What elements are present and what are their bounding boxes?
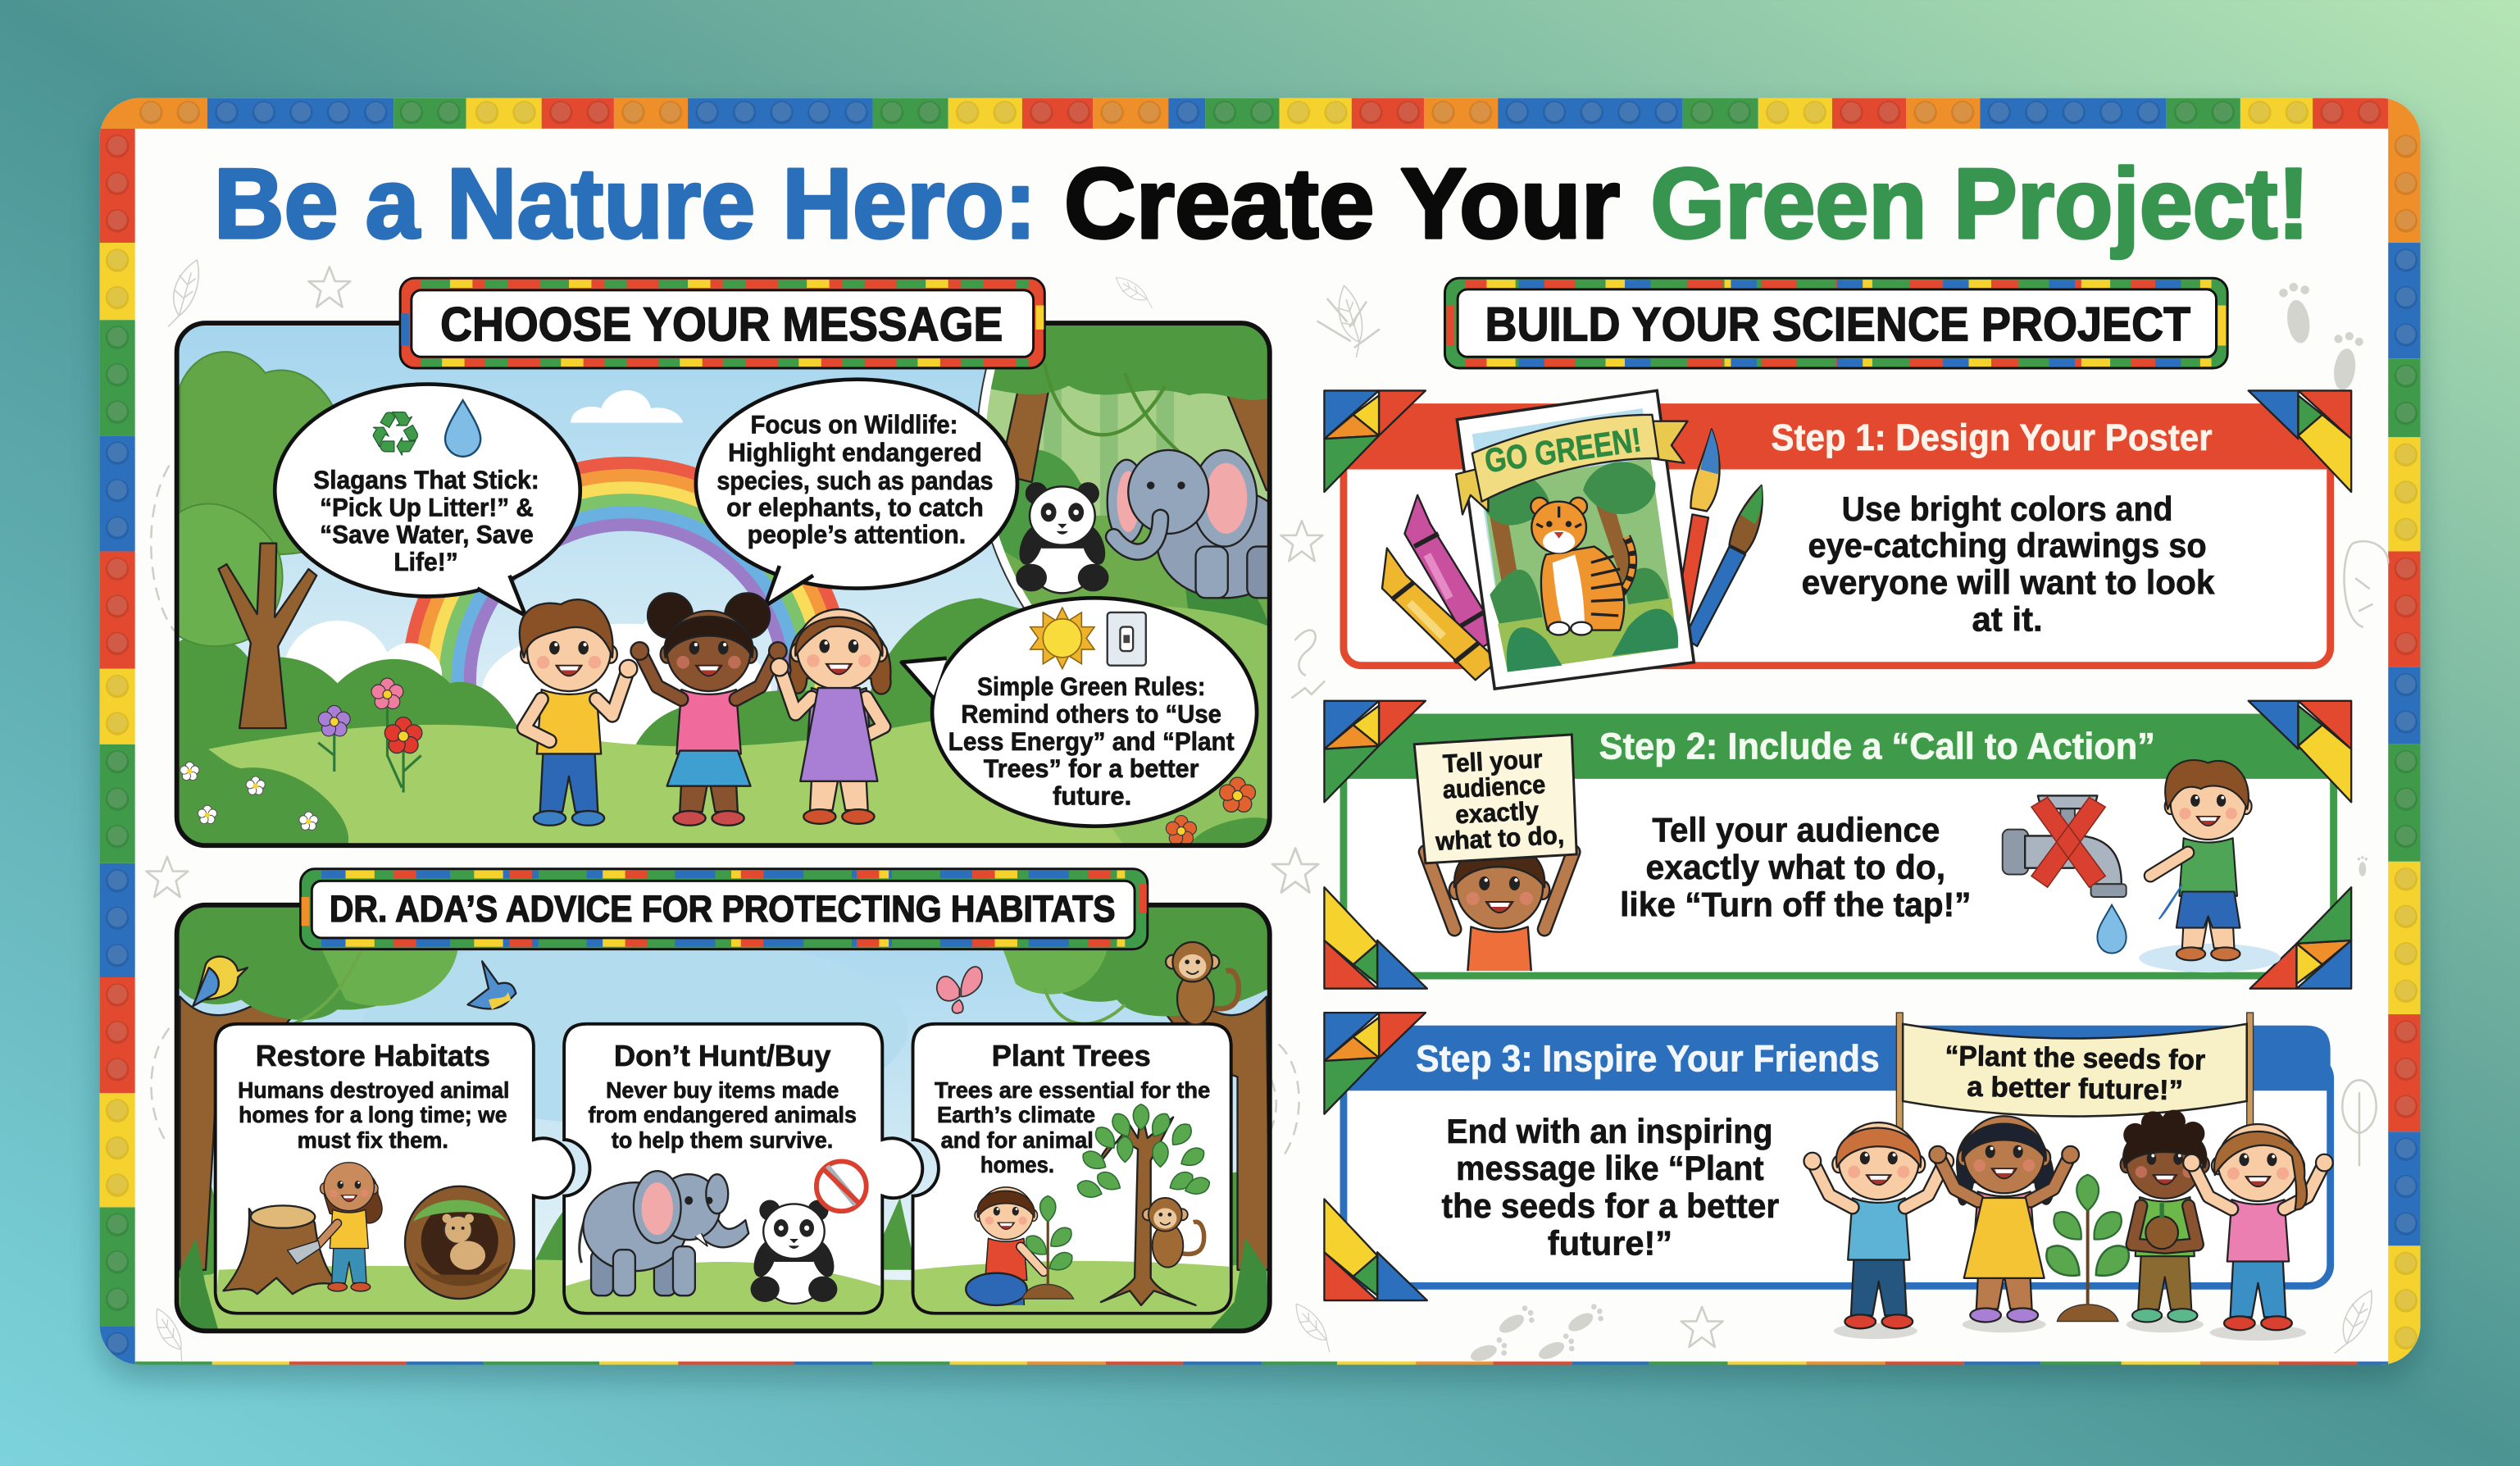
speech bubble: green rules: Simple Green Rules:	[977, 672, 1205, 701]
step 1 body text: at it.	[1972, 599, 2043, 638]
icon: butterfly	[937, 967, 982, 1013]
card: don't hunt or buy: from endangered animals	[589, 1102, 857, 1127]
card: restore habitats: homes for a long time; we	[239, 1102, 507, 1127]
tangram corner top-left	[1324, 701, 1426, 802]
icon: flying blue bird	[467, 961, 516, 1009]
title: Be a Nature Hero:	[214, 148, 1036, 259]
speech bubble: wildlife: Highlight endangered	[728, 439, 982, 467]
banner: plant the seeds	[1896, 1013, 2254, 1141]
tangram corner bottom-left	[1324, 887, 1427, 989]
icon: recycle: ♻	[368, 398, 423, 470]
icon: monkey on tree	[1143, 1198, 1204, 1268]
step 1 body text	[1802, 489, 2215, 638]
speech bubble: wildlife: people’s attention.	[748, 521, 966, 549]
step 2 body text: exactly what to do,	[1646, 848, 1945, 886]
icon: panda	[1015, 482, 1110, 593]
hills and bushes	[177, 598, 1029, 772]
step 3 body text	[1442, 1112, 1779, 1263]
bubble text: “Pick Up Litter!” &	[320, 493, 534, 521]
child with trowel	[288, 1163, 382, 1291]
heading: choose your message	[400, 278, 1044, 368]
step 3 body text: future!”	[1548, 1224, 1672, 1263]
flowers	[318, 678, 422, 793]
child: boy holding plant pot	[2121, 1110, 2209, 1322]
clouds behind children	[285, 620, 771, 744]
step 2 band	[1340, 713, 2334, 779]
step 3 body text: End with an inspiring	[1446, 1112, 1772, 1150]
banner: plant the seeds: a better future!”	[1967, 1072, 2183, 1106]
icon: sun	[1030, 608, 1094, 669]
card: plant trees	[913, 1024, 1231, 1327]
speech bubble: green rules: Trees” for a better	[984, 754, 1199, 783]
step 1 body text: everyone will want to look	[1802, 563, 2215, 602]
puddle	[2139, 944, 2281, 972]
step 1 band	[1340, 403, 2334, 469]
bottom-left bush with white flowers	[177, 740, 348, 845]
step 1 body text: Use bright colors and	[1842, 489, 2173, 528]
child: boy in blue shirt	[1804, 1122, 1954, 1328]
card drop shadow	[100, 112, 2420, 1379]
child: girl in yellow dress	[1929, 1116, 2079, 1322]
icon: monkey on branch	[1166, 942, 1239, 1025]
rainbow	[405, 457, 839, 690]
sign: tell your audience: what to do,	[1434, 821, 1565, 856]
speech bubble: wildlife	[696, 380, 1017, 606]
doodles: faint background leaves, stars and footprints	[146, 257, 2388, 1361]
bubble text: Slagans That Stick:	[313, 466, 539, 494]
step 1 band title: Step 1: Design Your Poster	[1771, 417, 2213, 458]
card: don't hunt or buy: to help them survive.	[612, 1127, 833, 1153]
title: Create Your	[1064, 148, 1620, 259]
icon: elephant	[1108, 450, 1292, 598]
trees and foliage	[177, 905, 1270, 1331]
icon: animal burrow	[405, 1186, 514, 1299]
tangram corner bottom-left	[1324, 1200, 1427, 1300]
step 2 body text: like “Turn off the tap!”	[1620, 885, 1972, 923]
icon: panda	[749, 1200, 839, 1304]
background hills	[177, 1161, 1270, 1286]
child holding sign	[1426, 843, 1573, 1068]
card: plant trees: Trees are essential for the	[935, 1077, 1210, 1103]
child: girl in purple dress	[771, 609, 890, 824]
child: girl in pink shirt	[2183, 1124, 2333, 1330]
step 2 body text	[1620, 811, 1972, 923]
heading: Dr. Ada's advice: DR. ADA’S ADVICE FOR PROTECTING HABITATS	[330, 888, 1116, 930]
panel: choose your message	[177, 278, 1292, 900]
card: don't hunt or buy: Never buy items made	[606, 1077, 839, 1103]
jungle scene	[964, 321, 1292, 845]
step 3 band	[1340, 1026, 2331, 1090]
card: plant trees: Earth’s climate	[937, 1102, 1095, 1127]
speech bubble: green rules: future.	[1053, 781, 1131, 810]
lego brick border	[100, 98, 2422, 1366]
speech bubble: wildlife: Focus on Wildlife:	[751, 410, 958, 439]
tangram corner top-right	[2249, 390, 2351, 492]
tangram corner bottom-right	[2250, 887, 2351, 989]
step 1 panel	[1324, 390, 2351, 689]
footprints bottom	[1471, 1304, 1603, 1361]
icon: sapling and mound	[1021, 1196, 1076, 1299]
card: don't hunt or buy: Don’t Hunt/Buy	[614, 1039, 831, 1072]
big tree	[177, 352, 341, 728]
step 2 panel	[1324, 701, 2351, 1068]
boy washing hands	[2150, 760, 2252, 960]
grass	[177, 703, 1270, 845]
card: restore habitats	[216, 1024, 574, 1313]
icon: water tap with red cross	[2003, 795, 2127, 954]
tangram corner top-left	[1324, 1013, 1426, 1114]
sign: tell your audience: exactly	[1454, 796, 1540, 829]
icon: young plant	[2040, 1175, 2136, 1322]
icon: water drop	[2097, 905, 2127, 954]
card: plant trees: and for animal	[941, 1127, 1094, 1153]
footprints top right	[2278, 280, 2368, 876]
step 3 body text: the seeds for a better	[1442, 1186, 1779, 1225]
heading: build your science project: BUILD YOUR SCIENCE PROJECT	[1485, 298, 2190, 352]
speech bubble: wildlife: or elephants, to catch	[726, 493, 984, 521]
step 2 band title: Step 2: Include a “Call to Action”	[1599, 725, 2155, 767]
sign: tell your audience	[1414, 735, 1576, 863]
child: boy in yellow shirt	[520, 599, 637, 826]
card: restore habitats: Restore Habitats	[256, 1039, 490, 1072]
icon: water drop	[445, 400, 480, 457]
go green poster: GO GREEN!	[1482, 421, 1644, 480]
title	[218, 164, 2302, 261]
sign: tell your audience: Tell your	[1442, 744, 1543, 778]
bubble text	[313, 466, 539, 576]
step 1 body text: eye-catching drawings so	[1808, 526, 2207, 565]
poster ribbon	[1456, 421, 1687, 514]
speech bubble: green rules	[902, 598, 1257, 826]
icon: light switch	[1108, 612, 1146, 666]
tiger	[1531, 498, 1633, 635]
icon: perched bird	[193, 957, 248, 1006]
card: don't hunt or buy	[564, 1024, 922, 1313]
card: plant trees: homes.	[980, 1152, 1054, 1177]
banner: plant the seeds: “Plant the seeds for	[1945, 1040, 2205, 1077]
grass	[177, 1259, 1270, 1331]
heading: choose your message: CHOOSE YOUR MESSAGE	[440, 298, 1003, 352]
sign: tell your audience: audience	[1442, 770, 1546, 804]
speech bubble: green rules: Remind others to “Use	[961, 699, 1221, 728]
icon: tree with roots	[1075, 1104, 1212, 1305]
icon: no-buying sign	[816, 1161, 867, 1211]
ground foliage lower right	[1029, 604, 1270, 845]
step 3 body text: message like “Plant	[1456, 1149, 1764, 1187]
ground shadows	[1834, 1317, 2306, 1341]
step 3 panel	[1324, 1013, 2333, 1341]
heading: Dr. Ada's advice	[301, 869, 1148, 949]
tangram corner top-right	[2249, 701, 2351, 802]
icon: tree stump	[224, 1205, 341, 1294]
icon: paintbrushes	[1675, 429, 1763, 646]
card: restore habitats: must fix them.	[298, 1127, 448, 1153]
bubble text: Life!”	[393, 548, 458, 576]
icon: crayons	[1382, 495, 1499, 680]
child planting sapling	[966, 1187, 1044, 1327]
bubble text: “Save Water, Save	[320, 521, 534, 549]
tangram corner top-left	[1324, 390, 1426, 492]
panel: Dr. Ada's advice	[177, 869, 1270, 1331]
icon: elephant	[580, 1171, 748, 1295]
heading: build your science project	[1444, 278, 2227, 368]
speech bubble: green rules: Less Energy” and “Plant	[948, 727, 1235, 756]
title: Green Project!	[1650, 148, 2309, 259]
speech bubble: wildlife: species, such as pandas	[716, 467, 994, 495]
child: girl in pink shirt	[630, 593, 787, 826]
small cloud	[571, 390, 683, 423]
speech bubble: slogans	[275, 385, 580, 616]
step 3 band title: Step 3: Inspire Your Friends	[1416, 1038, 1880, 1080]
card: plant trees: Plant Trees	[992, 1039, 1151, 1072]
step 2 body text: Tell your audience	[1652, 811, 1940, 849]
main poster card	[100, 98, 2422, 1367]
card: restore habitats: Humans destroyed animal	[238, 1077, 509, 1103]
go green poster	[1456, 390, 1694, 689]
